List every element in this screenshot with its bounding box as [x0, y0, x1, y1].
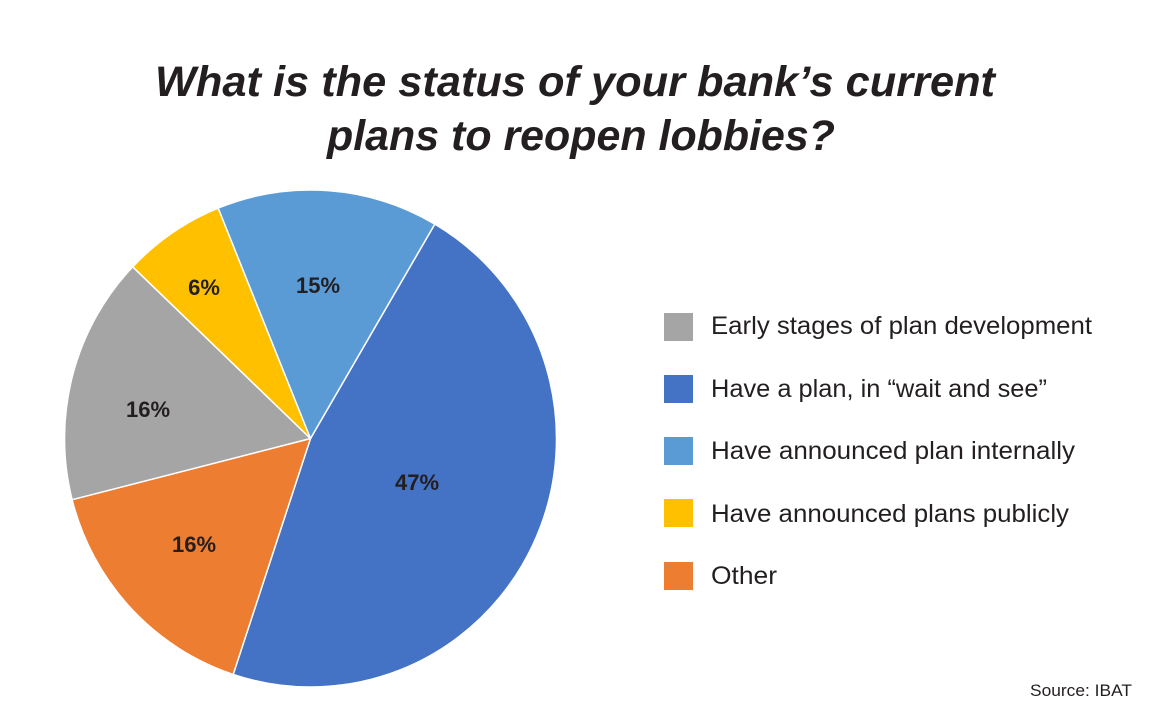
- pie value labels: 6%: [188, 275, 220, 300]
- legend item: announced internally: Have announced plan internally: [711, 437, 1076, 465]
- slice: have a plan, wait and see: [233, 224, 556, 687]
- source note: Source: IBAT: [1030, 681, 1132, 700]
- pie chart: [65, 190, 556, 687]
- pie value labels: 16%: [172, 532, 216, 557]
- slice: other: [72, 438, 310, 674]
- slice: early stages: [65, 267, 310, 500]
- title: [155, 58, 997, 160]
- slice: announced publicly: [133, 208, 310, 438]
- legend item: other: Other: [711, 562, 777, 590]
- slice: announced internally: [218, 190, 435, 438]
- legend: [664, 312, 1092, 590]
- legend item: announced publicly: Have announced plans publicly: [711, 500, 1070, 528]
- pie value labels: 16%: [126, 397, 170, 422]
- title: plans to reopen lobbies?: [326, 112, 835, 160]
- legend item: wait and see: Have a plan, in “wait and see”: [711, 375, 1047, 403]
- pie value labels: [126, 273, 439, 557]
- legend item: other: [664, 562, 777, 590]
- pie value labels: 15%: [296, 273, 340, 298]
- pie value labels: 47%: [395, 470, 439, 495]
- legend item: early stages: Early stages of plan development: [711, 312, 1092, 340]
- title: What is the status of your bank’s current: [155, 58, 997, 106]
